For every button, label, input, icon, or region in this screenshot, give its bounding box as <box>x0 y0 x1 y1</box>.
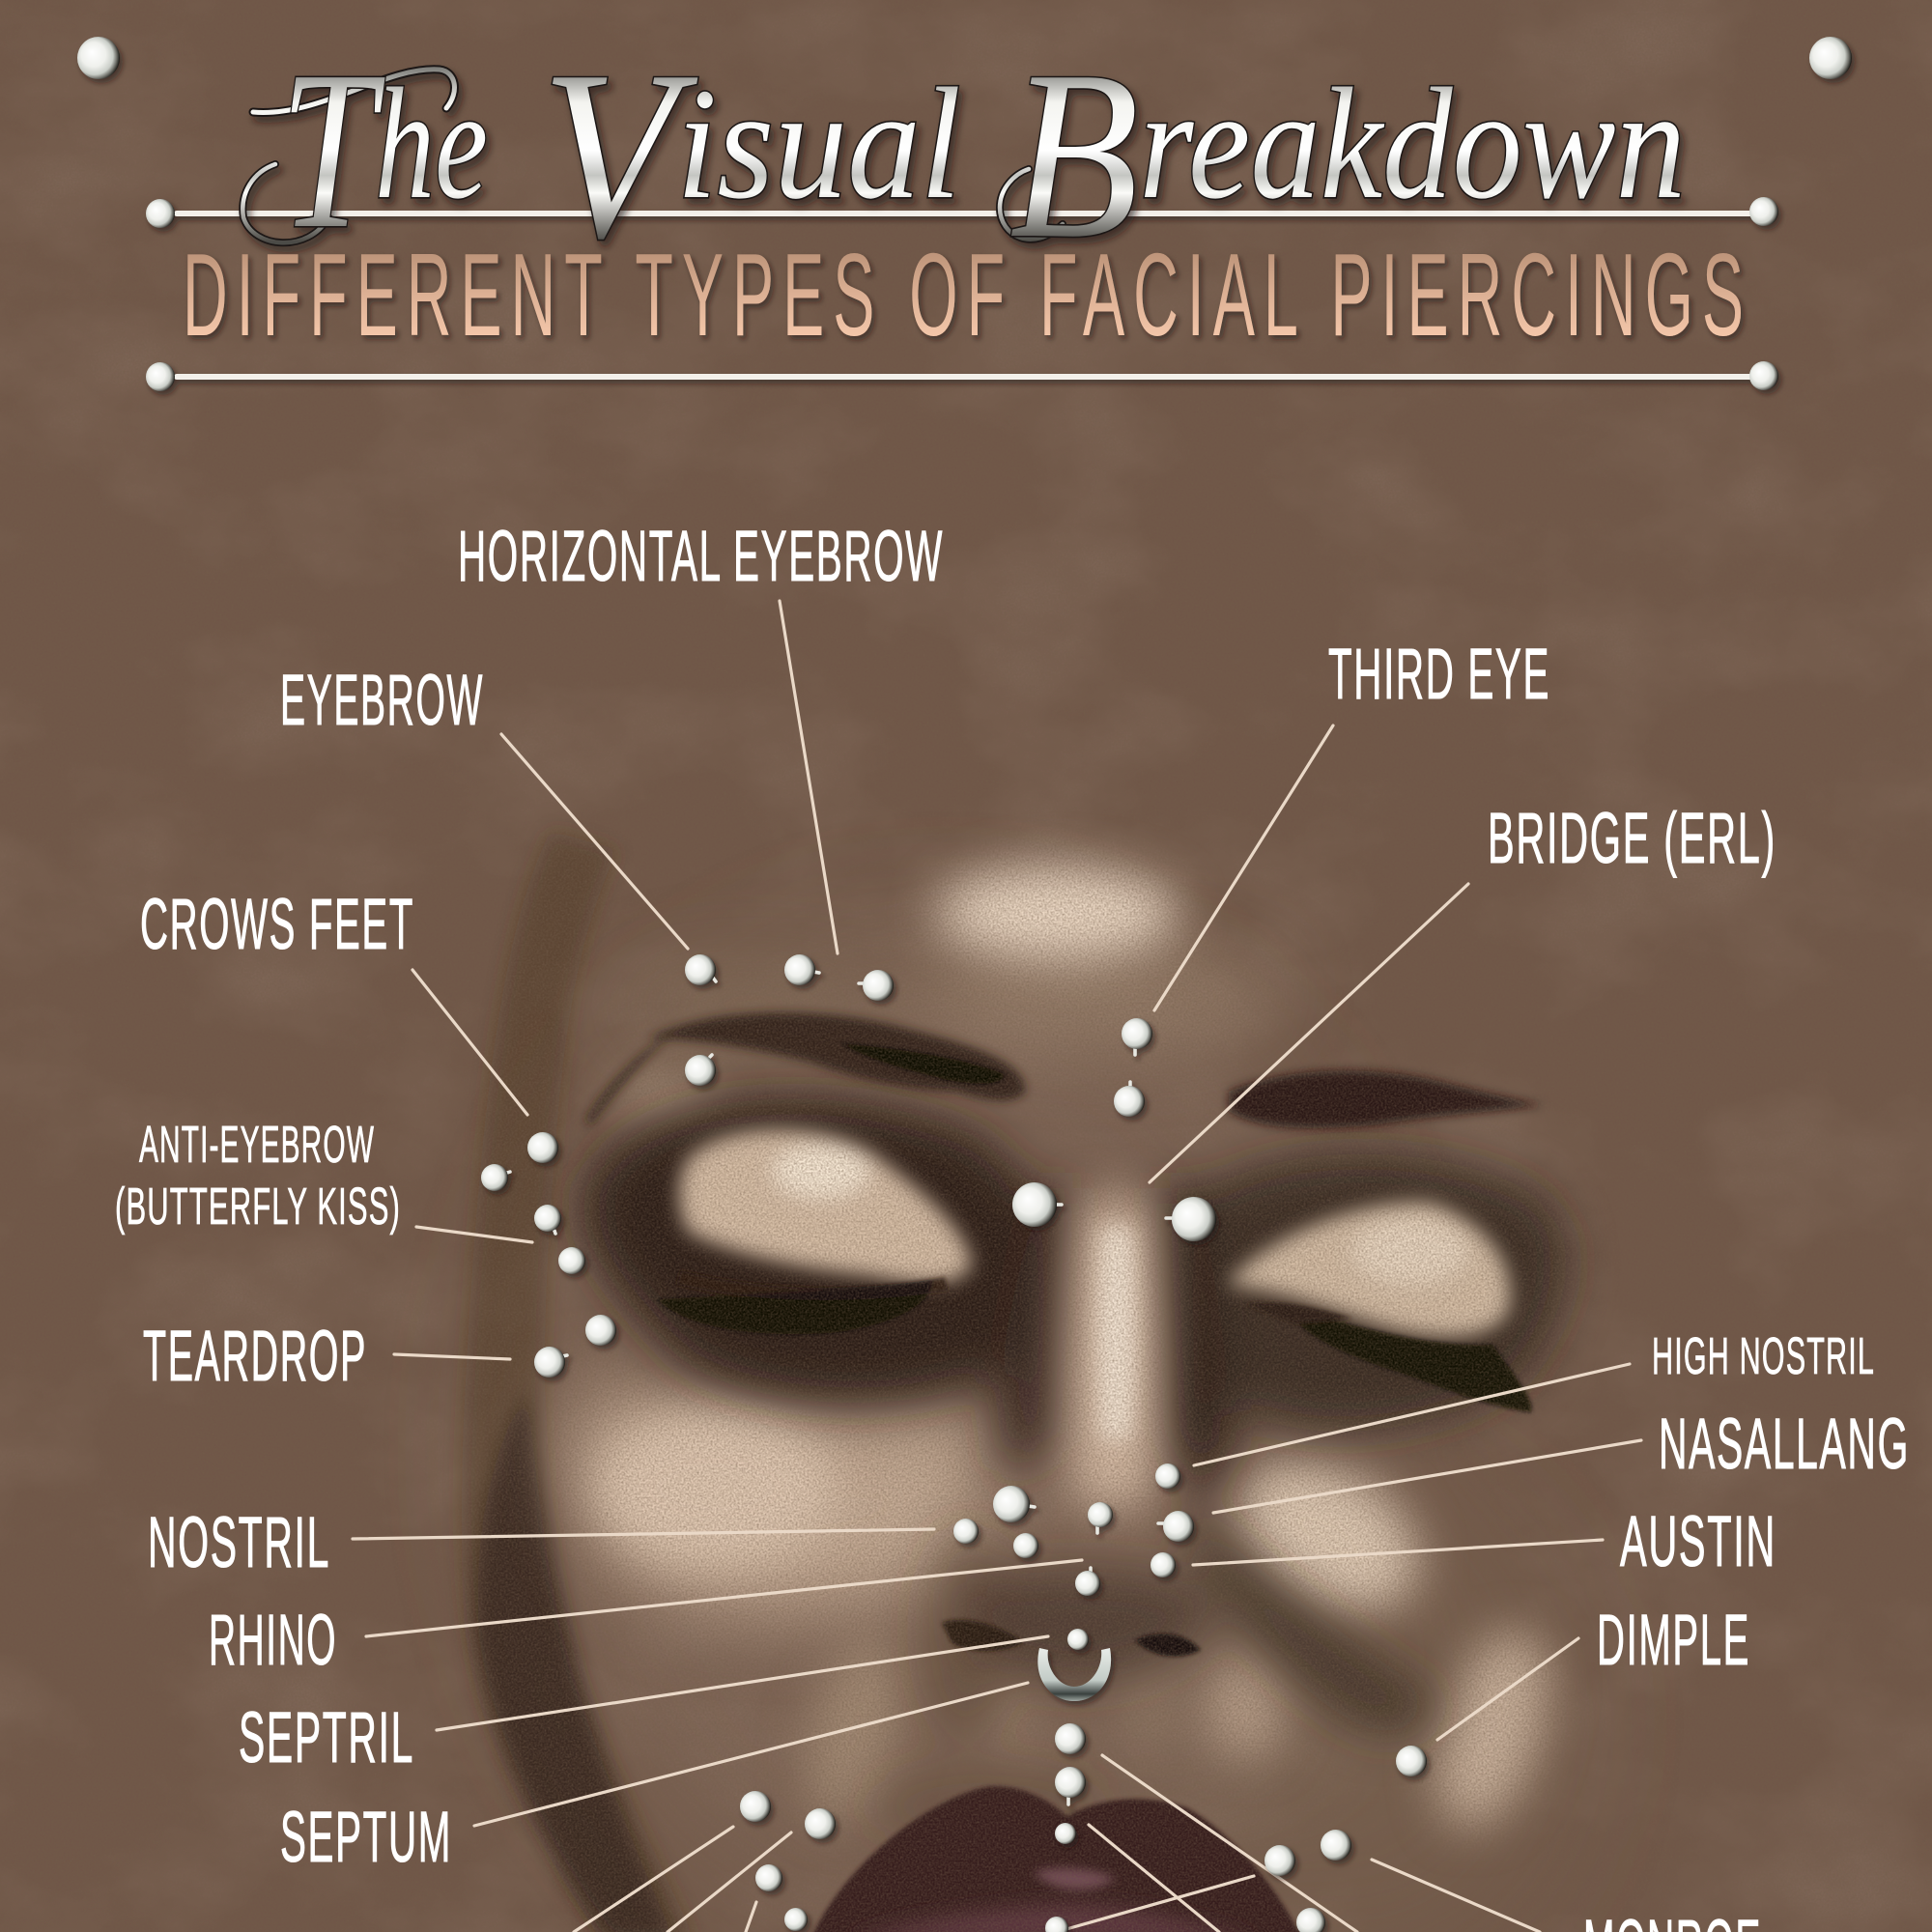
callout: horizontal eyebrow <box>458 516 944 953</box>
barbell divider: upper <box>146 197 1778 228</box>
illustration: face <box>462 831 1570 1932</box>
brows <box>584 1012 1544 1128</box>
callout: eyebrow <box>280 660 688 949</box>
hair band and jaw shadow <box>462 831 696 1932</box>
callout: dimple <box>1437 1600 1750 1740</box>
title <box>242 21 1686 289</box>
title: V <box>541 21 698 289</box>
callout: nostril: NOSTRIL <box>148 1502 330 1582</box>
lips <box>810 1786 1304 1932</box>
callout: teardrop: TEARDROP <box>143 1316 367 1396</box>
piercing studs <box>481 954 1427 1932</box>
callout: monroe <box>1372 1860 1762 1932</box>
callout: austin <box>1193 1501 1776 1581</box>
title: B <box>1009 21 1139 289</box>
callout: high nostril <box>1194 1327 1875 1465</box>
barbell divider: lower <box>146 361 1778 391</box>
callout: third eye <box>1154 634 1550 1010</box>
lashes and nostrils <box>657 1043 1532 1657</box>
corner pearl: top right <box>1809 37 1852 79</box>
leader lines: lower face <box>574 1755 1357 1932</box>
callout: nasallang <box>1213 1404 1910 1513</box>
title: isual <box>676 55 961 232</box>
callout: anti-eyebrow: ANTI-EYEBROW <box>139 1116 375 1174</box>
callout: septril: SEPTRIL <box>239 1697 414 1777</box>
title: T <box>280 24 385 275</box>
title: he <box>375 55 488 232</box>
callout: crows feet <box>140 884 527 1115</box>
callout: third eye: THIRD EYE <box>1328 634 1550 714</box>
skin highlights <box>577 947 1275 1613</box>
callout: austin: AUSTIN <box>1620 1501 1776 1581</box>
callout: dimple: DIMPLE <box>1597 1600 1750 1680</box>
callout: septril <box>239 1636 1048 1777</box>
callout: septum: SEPTUM <box>280 1797 452 1877</box>
corner pearl: top left <box>77 37 120 79</box>
callout: crows feet: CROWS FEET <box>140 884 414 964</box>
eyelids and nose bridge <box>679 1129 1510 1336</box>
callout: rhino: RHINO <box>209 1600 337 1680</box>
callout: nostril <box>148 1502 934 1582</box>
callout: bridge <box>1150 798 1776 1182</box>
title: reakdown <box>1139 55 1686 232</box>
callout: eyebrow: EYEBROW <box>280 660 484 740</box>
callout: septum <box>280 1683 1028 1877</box>
face broad tone <box>522 947 1555 1932</box>
callout: horizontal eyebrow: HORIZONTAL EYEBROW <box>458 516 944 596</box>
callout: anti-eyebrow: (BUTTERFLY KISS) <box>115 1178 401 1236</box>
icon: septum ring <box>1037 1648 1111 1701</box>
callout: rhino <box>209 1560 1082 1680</box>
callout: anti-eyebrow <box>115 1116 532 1242</box>
soft shadows: sockets, nose, cheeks <box>583 1098 1567 1845</box>
